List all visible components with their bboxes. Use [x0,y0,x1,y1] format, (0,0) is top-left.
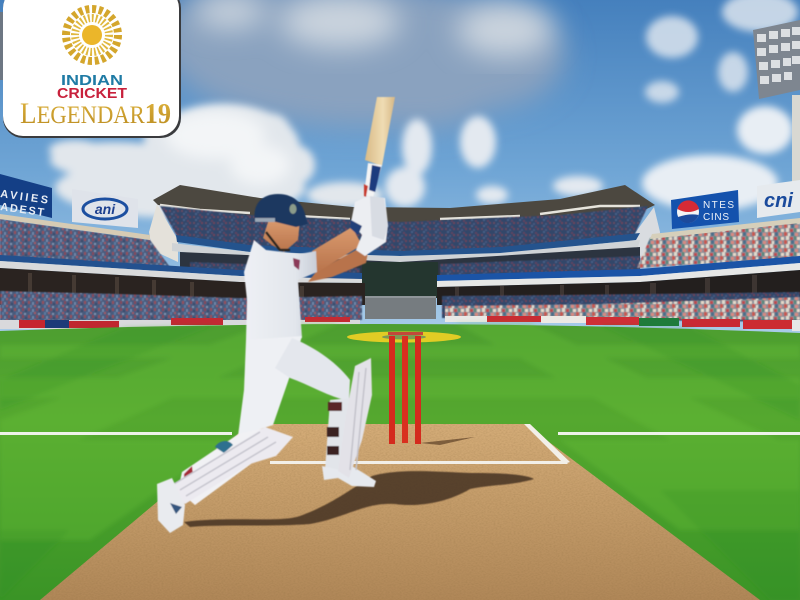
crease line outfield [0,432,800,435]
stumps [388,332,475,445]
billboard: white logo: ani [95,201,116,217]
front pad [338,358,372,478]
front forearm [312,227,362,273]
logo text: Indian: INDIAN [61,73,123,89]
advertising boards [0,316,800,331]
billboard: pepsi [671,190,739,229]
player shadow [184,471,534,527]
batsman [157,97,395,533]
grass field [0,324,800,600]
front shoe [322,466,376,487]
billboard: left blue: AVIIES [0,188,49,207]
distant tower left [0,12,3,80]
stadium: left stand [0,214,365,322]
helmet [254,194,308,227]
logo text: Cricket: CRICKET [57,86,127,102]
billboard: left blue: ADEST [0,201,45,219]
front shin [325,398,350,470]
neck and face [263,220,300,252]
gloves [350,196,388,256]
stadium: central stand [149,185,660,282]
back forearm [308,250,368,282]
rear leg [238,336,302,436]
pitch circle [347,332,461,342]
clouds [49,0,798,218]
torso shirt [244,240,317,345]
stadium: right stand [437,218,800,322]
logo card [3,0,181,138]
billboard: left blue [0,174,52,219]
billboard: white right: cni [764,190,793,212]
logo emblem [66,9,118,61]
rear shoe [157,478,185,533]
front thigh [275,338,350,400]
logo text: Legendar 19: LEGENDAR19 [20,97,171,130]
mowing stripes [0,323,800,600]
billboard: white logo [72,189,138,228]
pitch [40,424,760,600]
rear pad [167,427,293,504]
sky background [0,0,800,340]
sleeve badge [293,258,300,270]
billboard: pepsi: CINS [703,212,729,223]
billboard: pepsi: NTES [703,200,734,211]
bat [364,97,395,197]
rear calf [178,428,270,505]
stadium: centre building [362,262,438,319]
billboard: white right [757,180,800,218]
floodlight tower right [753,20,800,185]
